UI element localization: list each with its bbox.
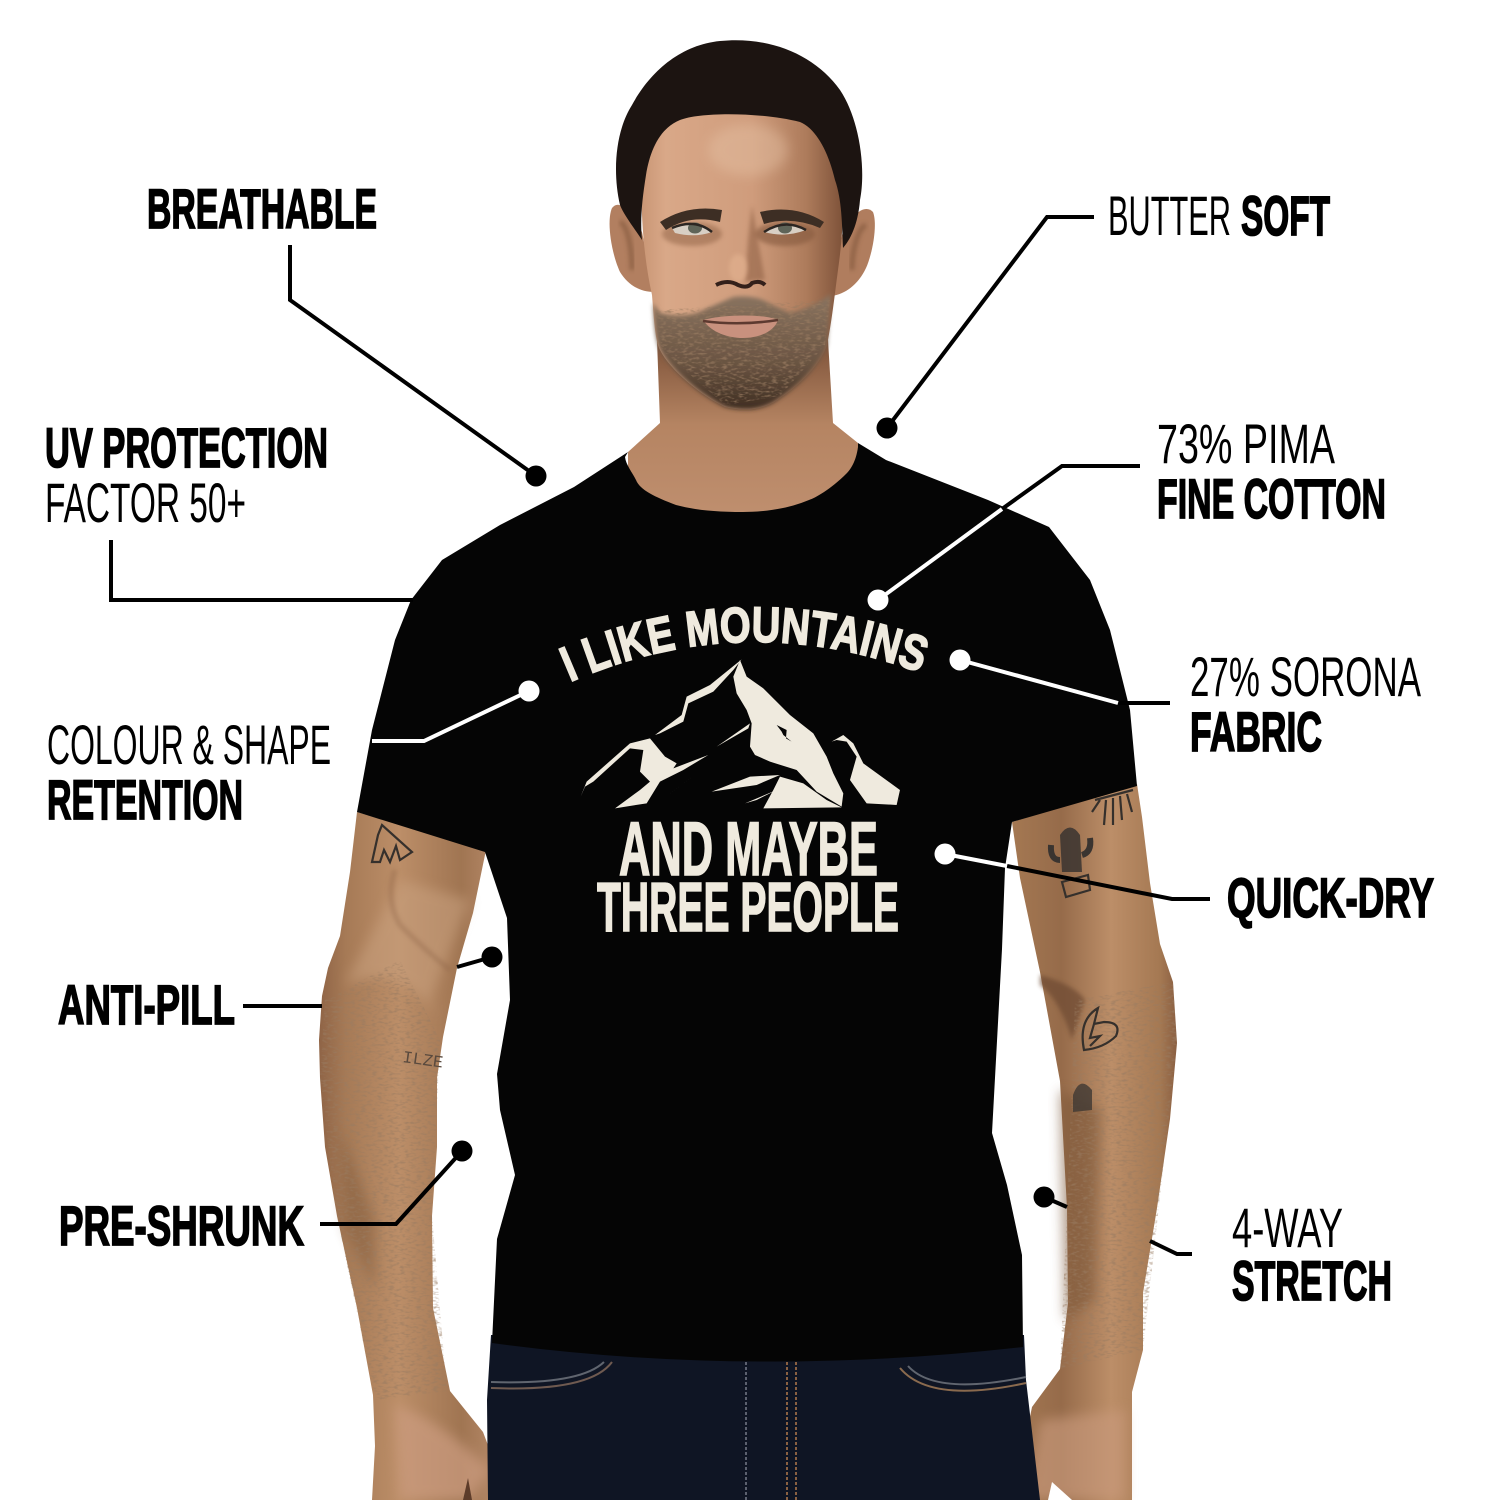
photo: man wearing black t-shirt [319,40,1177,1500]
print: AND MAYBE: AND MAYBE [619,807,878,892]
jeans [487,1335,1040,1500]
hand finger gaps [463,1478,1072,1500]
callout: anti-pill: ANTI-PILL [58,973,235,1036]
nose shadow [745,205,765,282]
eye sockets [662,222,722,246]
callout: uv protection: UV PROTECTION [45,416,328,479]
callout: pre-shrunk [59,1140,472,1257]
hair [616,40,862,248]
face [641,105,843,410]
eyebrows [660,208,722,230]
callout: 73% pima fine cotton [868,412,1386,610]
callout: breathable [147,177,546,486]
eyes [672,225,712,235]
print: I LIKE MOUNTAINS: I LIKE MOUNTAINS [558,606,928,682]
callout: 73% pima fine cotton: 73% PIMA [1157,412,1335,475]
callout: 27% sorona fabric: FABRIC [1190,700,1322,763]
tattoo: broken heart [1083,1008,1118,1050]
callout: colour and shape retention [47,680,540,831]
callout: uv protection [45,416,413,600]
callout: quick-dry [934,844,1434,929]
callout: pre-shrunk: PRE-SHRUNK [59,1194,304,1257]
left arm [319,812,497,1500]
nostrils [716,282,765,287]
forehead highlight [708,124,788,176]
callout: 4-way stretch [1034,1186,1392,1312]
tattoo: cactus [1051,828,1090,897]
ears [610,205,875,296]
arm shading [340,870,1125,1500]
callout: anti-pill [58,946,502,1036]
callout: 27% sorona fabric [950,645,1421,763]
callout: colour and shape retention: COLOUR & SHAPE [47,713,331,776]
tattoo: elephant [372,825,412,862]
neck [628,340,858,528]
callout: butter soft: SOFT [1241,184,1330,247]
callout: breathable: BREATHABLE [147,177,377,240]
right arm [1012,784,1177,1500]
print: THREE PEOPLE: THREE PEOPLE [597,868,899,946]
callout: 4-way stretch: 4-WAY [1232,1196,1343,1259]
callout: colour and shape retention: RETENTION [47,768,243,831]
beard texture [655,300,830,405]
t-shirt [357,443,1137,1362]
tattoo: burger [1073,1084,1092,1112]
callout: butter soft: BUTTER [1108,184,1231,247]
callout: 4-way stretch: STRETCH [1232,1249,1392,1312]
callout: butter soft [876,184,1330,438]
mouth [703,316,778,338]
print: mountain graphic [581,659,900,808]
tattoo: sun eye [1092,790,1133,825]
arm hair texture [320,960,1177,1400]
callout: uv protection: FACTOR 50+ [45,471,246,534]
beard [653,294,831,410]
tattoo: ILZE: ILZE [401,1049,444,1074]
